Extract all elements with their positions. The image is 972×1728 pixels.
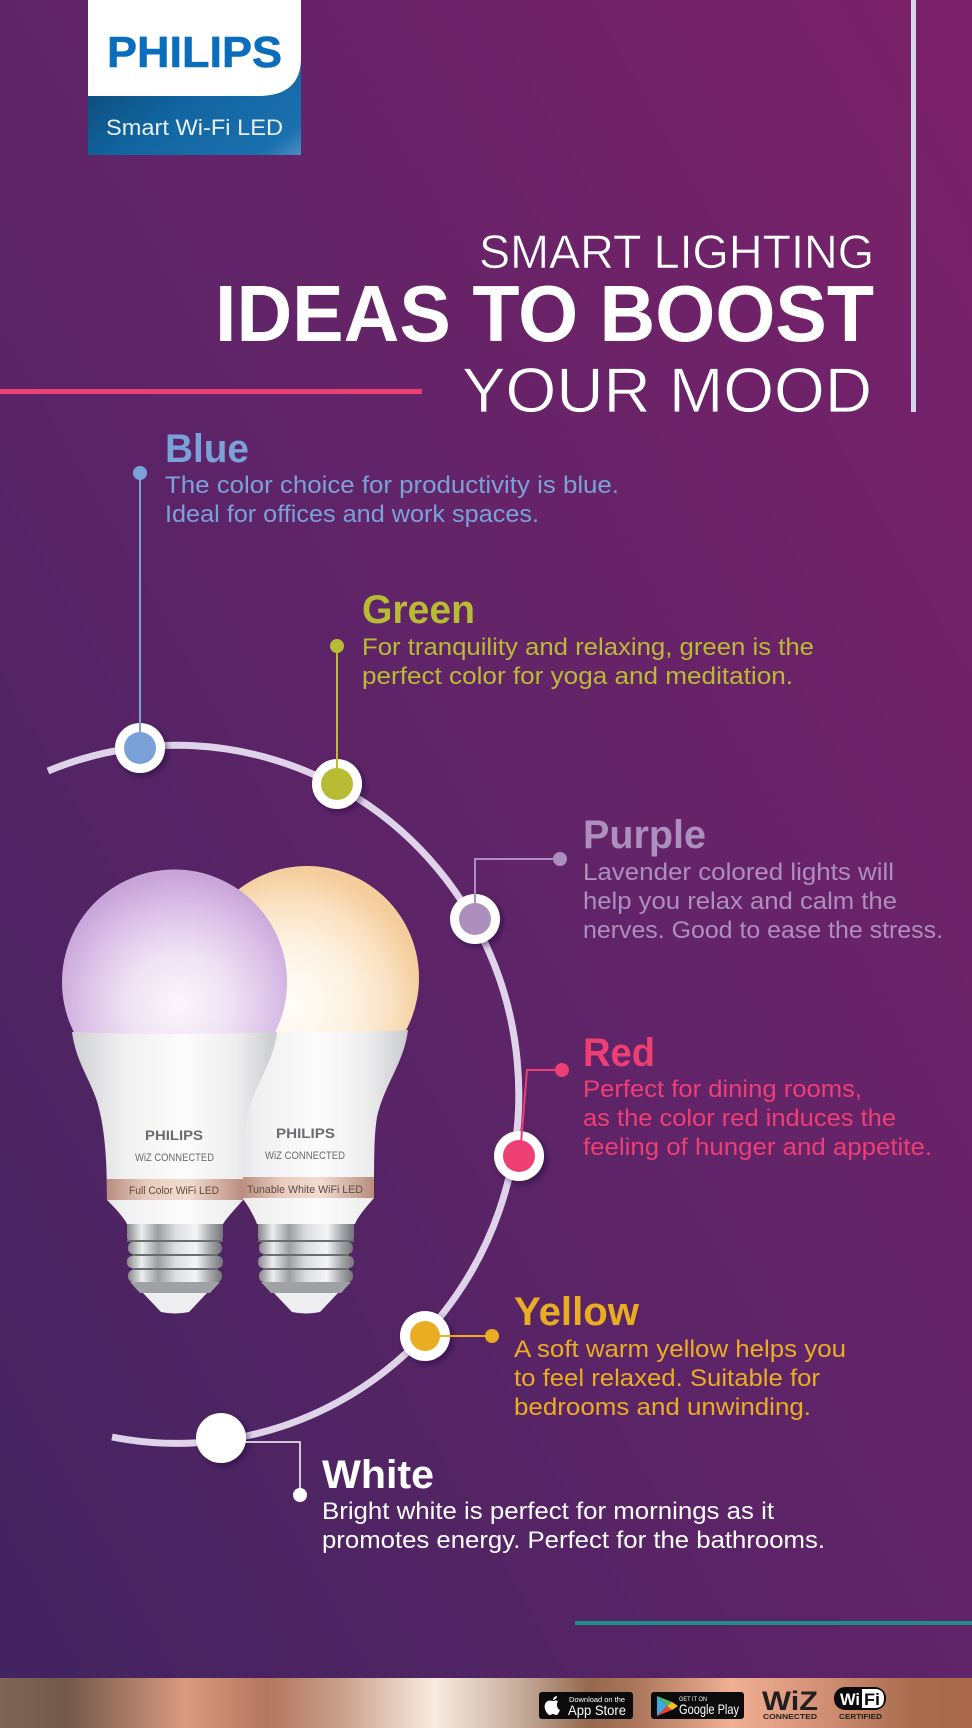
accent teal line [575, 1621, 972, 1625]
description: purple: nerves. Good to ease the stress. [583, 917, 943, 944]
heading: Red: Red [583, 1031, 655, 1075]
bulb: tunable white: WiZ CONNECTED [265, 1150, 345, 1162]
badge: Google Play: Google Play [679, 1701, 739, 1717]
connector: yellow [438, 1329, 499, 1343]
logo: WiZ connected: CONNECTED [763, 1712, 818, 1721]
bulb: full color: Full Color WiFi LED [129, 1185, 219, 1197]
description: blue [165, 472, 619, 528]
heading: Yellow: Yellow [514, 1290, 640, 1334]
colour arc [48, 745, 519, 1443]
description: red: as the color red induces the [583, 1105, 896, 1132]
logo: Wi-Fi certified: CERTIFIED [839, 1712, 883, 1721]
node: purple [450, 894, 500, 944]
description: yellow: A soft warm yellow helps you [514, 1336, 846, 1363]
description: red: feeling of hunger and appetite. [583, 1134, 932, 1161]
connector: green [330, 639, 344, 771]
footer strip [0, 1678, 972, 1728]
heading: Blue: Blue [165, 427, 249, 471]
logo white panel [88, 0, 301, 96]
title: YOUR MOOD [462, 356, 872, 426]
logo: Wi-Fi certified: Fi [864, 1690, 880, 1709]
bulb: tunable white: PHILIPS [276, 1125, 335, 1141]
description: purple: Lavender colored lights will [583, 859, 894, 886]
badge: App Store: Download on the [569, 1697, 625, 1704]
description: purple: help you relax and calm the [583, 888, 897, 915]
description: yellow: to feel relaxed. Suitable for [514, 1365, 820, 1392]
badge: Google Play: GET IT ON [679, 1696, 707, 1703]
panel: white [196, 1413, 825, 1554]
logo: Wi-Fi certified [834, 1687, 886, 1721]
description: white [322, 1498, 825, 1554]
description: red: Perfect for dining rooms, [583, 1076, 862, 1103]
description: green: For tranquility and relaxing, green is the [362, 634, 814, 661]
heading: Purple: Purple [583, 813, 706, 857]
icon: apple [545, 1696, 560, 1715]
connector: purple [475, 852, 567, 905]
description: purple [583, 859, 943, 944]
panel: blue [115, 427, 619, 773]
panel: yellow [400, 1290, 846, 1421]
logo wordmark: PHILIPS [107, 28, 282, 77]
panel: red [494, 1031, 932, 1181]
connector: red [521, 1063, 569, 1143]
logo tagline: Smart Wi-Fi LED [106, 115, 283, 140]
heading: White: White [322, 1453, 434, 1497]
node: red [494, 1131, 544, 1181]
panel: green [312, 588, 814, 809]
description: blue: Ideal for offices and work spaces. [165, 501, 539, 528]
node: white [196, 1413, 246, 1463]
logo: Philips Smart Wi-Fi LED [88, 0, 301, 155]
description: white: Bright white is perfect for mornings as it [322, 1498, 774, 1525]
description: green: perfect color for yoga and meditation. [362, 663, 793, 690]
badge: App Store: App Store [568, 1702, 626, 1718]
description: white: promotes energy. Perfect for the bathrooms. [322, 1527, 825, 1554]
description: red [583, 1076, 932, 1161]
icon: play triangle [657, 1696, 678, 1716]
bulb: full color [62, 870, 287, 1314]
title [215, 225, 874, 426]
description: blue: The color choice for productivity is blue. [165, 472, 619, 499]
badge: Google Play [651, 1692, 744, 1719]
accent vertical line [911, 0, 916, 412]
description: yellow [514, 1336, 846, 1421]
bulb: full color: WiZ CONNECTED [135, 1152, 214, 1164]
node: yellow [400, 1311, 450, 1361]
description: yellow: bedrooms and unwinding. [514, 1394, 811, 1421]
badge: App Store [539, 1692, 633, 1719]
accent pink line [0, 389, 422, 394]
description: green [362, 634, 814, 690]
bulbs [62, 866, 419, 1314]
title: IDEAS TO BOOST [215, 269, 874, 358]
connector: blue [133, 466, 147, 735]
bulb: full color: PHILIPS [145, 1127, 203, 1143]
connector: white [244, 1442, 307, 1502]
title: SMART LIGHTING [479, 225, 874, 278]
logo: WiZ connected: WiZ [762, 1686, 818, 1716]
bulb: tunable white: Tunable White WiFi LED [247, 1184, 363, 1196]
node: green [312, 759, 362, 809]
logo: Wi-Fi certified: Wi [840, 1690, 860, 1709]
heading: Green: Green [362, 588, 475, 632]
node: blue [115, 723, 165, 773]
bulb: tunable white [195, 866, 419, 1314]
panel: purple [450, 813, 943, 944]
